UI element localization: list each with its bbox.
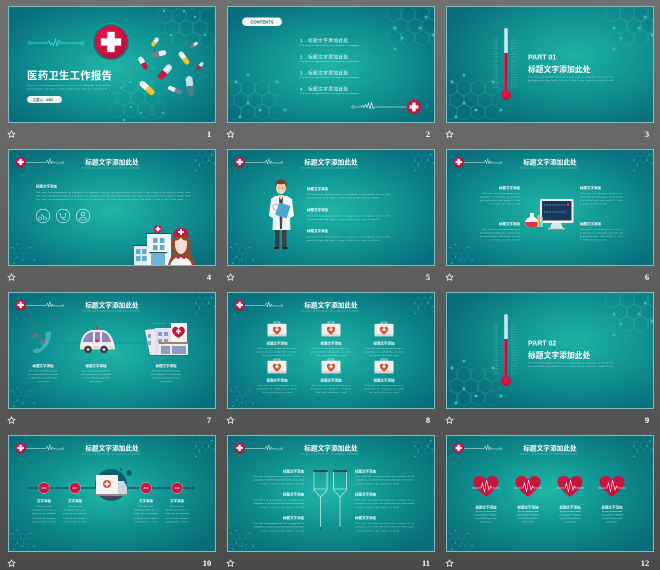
- kit item 3: [364, 322, 404, 357]
- section description: [528, 76, 614, 82]
- slide 2: contents: [227, 6, 435, 123]
- kit item 6: 标题文字添加: [374, 378, 395, 382]
- header icon: [16, 157, 64, 168]
- slide 4: text with hospital and nurse: [8, 149, 216, 266]
- text block 3: 标题文字添加: [307, 228, 328, 233]
- slide title: 标题文字添加此处: [85, 158, 139, 166]
- kit item 6: projector or computer, or print: [364, 388, 404, 390]
- right text block 1: it into a film to be used in a field: [355, 482, 400, 486]
- kit item 2: [311, 322, 351, 357]
- text block bottom right: [580, 221, 624, 242]
- text column 2: The user can: [68, 505, 83, 508]
- kit item 2: the presentation and: [316, 354, 347, 357]
- left text block 1: [253, 468, 305, 486]
- text block top left: presentation and make it into: [480, 199, 521, 202]
- illustration: flask and test tubes: [525, 213, 543, 228]
- text column 4: [165, 498, 189, 524]
- text column 1: 文字添加: [37, 498, 51, 503]
- illustration: left crutch: [314, 471, 328, 529]
- kit item 3: The user can demonstrate on a: [365, 347, 404, 350]
- text column 2: [63, 498, 87, 524]
- slide numbers: 7: [207, 415, 212, 425]
- heart item 4: or print the present: [602, 517, 622, 520]
- right text block 1: The user can demonstrate on a projector or: [355, 475, 414, 478]
- slide numbers: 9: [645, 415, 649, 425]
- kit item 5: projector or computer, or print: [311, 388, 351, 390]
- header icon: [454, 157, 502, 168]
- text column 4: and make it film: [166, 520, 189, 524]
- contents list: 3 . 标题文字添加此处: [300, 70, 348, 76]
- cover description: presentation and make it into a film to be used in a wider field: [27, 88, 108, 90]
- right text block 1: [355, 468, 415, 486]
- text block top right: The user can demonstrate on a: [580, 192, 623, 195]
- right text block 2: it into a film to be used in a field: [355, 506, 400, 509]
- year markers: 2016: [41, 487, 47, 490]
- illustration: hospital with heart sign: [145, 323, 189, 356]
- part heading: PART 02: [528, 340, 556, 348]
- text column 2: 标题文字添加: [86, 363, 107, 368]
- slide 12: four hearts: [446, 435, 654, 552]
- cover description: [27, 84, 111, 90]
- kit item 6: the presentation and: [369, 391, 400, 394]
- slide 6: monitor: [446, 149, 654, 266]
- slide subtitle: The user can demonstrate on a projector or computer: [301, 166, 359, 170]
- header icon: [454, 443, 502, 454]
- illustration: monitor: [540, 199, 574, 229]
- slide numbers: 11: [422, 558, 430, 568]
- text column 3: The user can: [139, 505, 154, 508]
- text block top left: 标题文字添加: [499, 185, 520, 190]
- text block bottom left: projector or computer, or print the: [480, 232, 521, 234]
- text block 1: 标题文字添加: [307, 186, 328, 191]
- text block 1: [307, 186, 391, 200]
- text column 1: on a projector or computer: [28, 373, 58, 376]
- heart item 3: or print the present: [560, 517, 580, 520]
- icon: capsules: [137, 37, 204, 96]
- left text block 3: The user can demonstrate on a projector or: [253, 522, 304, 525]
- section description: presentation and make it into a film to be used in a wider field: [528, 79, 614, 82]
- text column 2: on a projector or computer: [81, 373, 111, 376]
- text column 4: The user can: [170, 505, 185, 508]
- left text block 3: 标题文字添加: [283, 515, 304, 520]
- heart item 3: and make: [564, 522, 577, 524]
- text column 3: and make: [160, 381, 173, 383]
- slide title: 标题文字添加此处: [304, 158, 358, 166]
- text column 1: demonstrate on a: [32, 508, 56, 512]
- heart item 2: 标题文字添加: [518, 504, 539, 510]
- subheading: 标题文字添加: [36, 184, 57, 188]
- presenter pill: 汇报人：ABC: [33, 97, 54, 102]
- text block bottom right: presentation and make it into: [580, 235, 624, 238]
- heart item 1: or print the present: [476, 517, 496, 520]
- kit item 1: projector or computer, or print: [257, 350, 297, 354]
- heart item 3: The user can demonstrate: [560, 510, 581, 513]
- slide 1: cover: [8, 6, 216, 123]
- kit item 1: 标题文字添加: [266, 340, 288, 346]
- text block bottom right: 标题文字添加: [580, 221, 601, 226]
- text column 1: and make: [37, 381, 50, 383]
- text column 4: 文字添加: [170, 498, 184, 503]
- heart item 2: The user can demonstrate: [518, 510, 539, 513]
- text column 1: or print the presentation: [29, 376, 58, 380]
- slide title: 标题文字添加此处: [85, 444, 139, 452]
- heart item 2: or print the present: [518, 517, 538, 520]
- section description: [528, 362, 614, 368]
- contents list: 1 . 标题文字添加此处: [300, 37, 348, 44]
- heart item 3: on a projector or computer: [559, 514, 581, 516]
- left text block 1: computer, or print the presentation and make: [253, 478, 305, 482]
- text column 3: and make it film: [134, 520, 158, 524]
- slide numbers: 12: [641, 558, 649, 568]
- kit item 5: [311, 359, 351, 394]
- text block 3: [307, 228, 391, 242]
- left text block 2: computer, or print the presentation and make: [253, 502, 305, 505]
- right text block 1: computer, or print the presentation and make: [355, 478, 415, 482]
- left text block 2: 标题文字添加: [283, 492, 304, 496]
- contents list: The user can demonstrate on a projector or computer: [300, 76, 359, 79]
- icon: phone with 24: [32, 331, 51, 353]
- icon: phone with 24: 24: [40, 340, 46, 346]
- header icon: [234, 443, 283, 454]
- heart item 4: The user can demonstrate: [602, 510, 623, 513]
- heart item 3: [556, 476, 584, 524]
- kit item 5: The user can demonstrate on a: [312, 384, 351, 387]
- body text: The user can demonstrate on a projector or computer, or print the presentation and make it into a film to be used in a wider field: [36, 194, 191, 198]
- heart item 2: [514, 476, 542, 524]
- header icon: [234, 157, 283, 168]
- heart item 2: on a projector or computer: [517, 514, 539, 516]
- kit item 6: The user can demonstrate on a: [365, 384, 404, 387]
- right text block 2: 标题文字添加: [355, 492, 376, 496]
- slide numbers: 8: [426, 415, 430, 425]
- kit item 3: projector or computer, or print: [364, 350, 404, 354]
- slide title: 标题文字添加此处: [304, 444, 358, 452]
- text column 2: and make: [90, 381, 103, 383]
- text column 1: projector or computer: [32, 512, 56, 515]
- left text block 1: it into a film to be used in a field: [260, 482, 305, 486]
- text block top right: a film to be used: [580, 202, 607, 206]
- contents list: The user can demonstrate on a projector or computer: [300, 92, 359, 95]
- slide title: 标题文字添加此处: [523, 158, 577, 166]
- slide 7: emergency flow: [8, 292, 216, 409]
- contents pill: [242, 18, 282, 26]
- text column 1: [32, 498, 56, 524]
- icon: phone with 24: 24: [32, 334, 38, 340]
- text block bottom left: presentation and make it into: [480, 235, 521, 238]
- kit item 1: the presentation and: [262, 354, 293, 357]
- text block 1: The user can demonstrate on a projector or computer, or print the: [307, 193, 391, 196]
- heart item 1: The user can demonstrate: [476, 510, 497, 513]
- slide numbers: 4: [207, 272, 212, 282]
- slide numbers: 10: [203, 558, 211, 568]
- kit item 2: The user can demonstrate on a: [312, 347, 351, 350]
- text block top left: [480, 185, 521, 206]
- kit item 1: The user can demonstrate on a: [258, 347, 297, 350]
- heart item 2: and make: [522, 522, 535, 524]
- text column 2: demonstrate on a: [64, 508, 87, 512]
- left text block 3: it into a film to be used in a field: [260, 530, 305, 532]
- heart item 3: 标题文字添加: [560, 504, 581, 510]
- text block 1: presentation and make it into a film to be used in a field: [307, 196, 380, 200]
- text column 3: 文字添加: [139, 498, 153, 503]
- text column 2: [81, 363, 111, 383]
- header icon: [234, 300, 283, 311]
- timeline arrow: [28, 486, 196, 490]
- title: 医药卫生工作报告: [27, 69, 112, 82]
- text column 1: or print the project: [32, 517, 56, 520]
- text column 3: The user can demonstrate: [152, 370, 181, 372]
- icon: thermometer: [495, 28, 515, 100]
- text column 3: [134, 498, 158, 524]
- text column 4: projector or computer: [165, 512, 189, 515]
- illustration: ambulance: [80, 326, 115, 353]
- text block top left: projector or computer, or print the: [480, 196, 521, 198]
- kit item 4: projector or computer, or print: [257, 388, 297, 390]
- text block top left: The user can demonstrate on a: [482, 192, 521, 195]
- icon: heartbeat and cross: [352, 100, 421, 115]
- right text block 2: The user can demonstrate on a projector or: [355, 498, 414, 502]
- slide subtitle: The user can demonstrate on a projector or computer: [82, 310, 140, 312]
- heart item 4: [598, 476, 626, 524]
- left text block 1: 标题文字添加: [283, 468, 304, 474]
- kit item 2: projector or computer, or print: [311, 350, 351, 354]
- presenter pill: [27, 96, 62, 103]
- slide 11: crutches: [227, 435, 435, 552]
- right text block 2: computer, or print the presentation and make: [355, 502, 415, 505]
- slide title: 标题文字添加此处: [304, 300, 358, 310]
- slide subtitle: The user can demonstrate on a projector or computer: [301, 310, 359, 312]
- text block bottom left: a film to be used: [490, 238, 521, 242]
- right text block 3: The user can demonstrate on a projector or: [355, 522, 414, 525]
- text column 3: on a projector or computer: [151, 373, 181, 376]
- text block 2: [307, 207, 391, 221]
- text column 2: and make it film: [64, 520, 87, 524]
- right text block 3: it into a film to be used in a field: [355, 530, 400, 532]
- illustration: nurse: [168, 228, 196, 266]
- slide title: 标题文字添加此处: [523, 444, 577, 452]
- body text: The user can demonstrate on a projector or computer, or print the presentation and make it into a film to be used in a wider field: [36, 191, 191, 194]
- text column 3: or print the presentation: [152, 376, 181, 380]
- illustration: delivery truck on dark circle: [95, 468, 132, 501]
- slide 9: part 02: [446, 292, 654, 409]
- text column 1: 标题文字添加: [32, 363, 54, 368]
- right text block 1: 标题文字添加: [355, 468, 376, 474]
- text column 1: [28, 363, 58, 383]
- illustration: doctor: [269, 180, 294, 249]
- text column 2: projector or computer: [63, 512, 87, 515]
- kit item 4: The user can demonstrate on a: [258, 384, 297, 387]
- slide numbers: 6: [645, 272, 649, 282]
- kit item 5: 标题文字添加: [320, 378, 342, 382]
- text column 3: or print the project: [134, 517, 158, 520]
- text block bottom right: The user can demonstrate on a: [580, 228, 623, 231]
- slide subtitle: The user can demonstrate on a projector or computer: [520, 452, 578, 456]
- right text block 2: [355, 492, 415, 509]
- year markers: [38, 482, 182, 494]
- text column 2: or print the presentation: [82, 376, 111, 380]
- heart item 4: 标题文字添加: [602, 504, 623, 510]
- left text block 2: The user can demonstrate on a projector or: [253, 498, 304, 502]
- kit item 1: [257, 322, 297, 357]
- kit item 3: the presentation and: [369, 354, 400, 357]
- text block 2: 标题文字添加: [307, 207, 328, 212]
- text block top right: [580, 185, 624, 206]
- text column 3: 标题文字添加: [156, 363, 177, 368]
- contents list: The user can demonstrate on a projector or computer: [300, 44, 359, 47]
- section title: 标题文字添加此处: [528, 350, 591, 360]
- left text block 2: [253, 492, 305, 509]
- right text block 3: 标题文字添加: [355, 515, 376, 520]
- slide 10: timeline: [8, 435, 216, 552]
- right text block 3: computer, or print the presentation and make: [355, 526, 415, 528]
- illustration: right crutch: [333, 471, 347, 529]
- right text block 3: [355, 515, 415, 532]
- text block bottom left: The user can demonstrate on a: [482, 228, 521, 231]
- kit item 3: 标题文字添加: [374, 340, 395, 346]
- kit item 4: the presentation and: [262, 391, 293, 394]
- body text: [36, 191, 191, 201]
- slide title: 标题文字添加此处: [85, 300, 139, 310]
- text column 2: 文字添加: [68, 498, 82, 503]
- text block bottom left: [480, 221, 521, 242]
- text column 1: and make it film: [32, 520, 56, 524]
- part heading: PART 01: [528, 54, 556, 62]
- left text block 3: [253, 515, 305, 532]
- kit item 4: 标题文字添加: [266, 378, 288, 382]
- slide 3: part 01: [446, 6, 654, 123]
- contents list: 2 . 标题文字添加此处: [300, 54, 348, 60]
- kit item 2: 标题文字添加: [320, 340, 342, 346]
- text block bottom right: a film to be used: [580, 238, 607, 242]
- text block 3: presentation and make it into a film to be used in a field: [307, 239, 380, 242]
- body text: The user can demonstrate on a projector or computer, or print the presentation and make it into a film to be used: [36, 198, 184, 201]
- icon: thermometer: [495, 314, 515, 386]
- contents pill: CONTENTS: [250, 20, 274, 24]
- slide numbers: 2: [426, 129, 430, 139]
- heart item 1: [472, 476, 500, 524]
- year markers: 2019: [174, 487, 180, 490]
- slide subtitle: The user can demonstrate on a projector or computer: [301, 452, 359, 456]
- contents list: [300, 37, 359, 95]
- slide numbers: 3: [645, 129, 649, 139]
- slide 8: six first aid kits: [227, 292, 435, 409]
- heart item 1: 标题文字添加: [476, 504, 497, 510]
- contents list: The user can demonstrate on a projector or computer: [300, 60, 359, 63]
- contents list: 4 . 标题文字添加此处: [300, 86, 348, 92]
- slide numbers: [203, 129, 649, 568]
- left text block 2: it into a film to be used in a field: [260, 506, 305, 509]
- text block 3: The user can demonstrate on a projector or computer, or print the: [307, 236, 391, 238]
- header icon: [16, 443, 64, 454]
- kit item 5: the presentation and: [316, 391, 347, 394]
- slide subtitle: The user can demonstrate on a projector or computer: [520, 166, 578, 170]
- kit item 6: [364, 359, 404, 394]
- section description: presentation and make it into a film to be used in a wider field: [528, 365, 614, 368]
- icons: three circles: [36, 209, 90, 223]
- slide star markers: [8, 131, 453, 566]
- text column 4: or print the project: [166, 517, 189, 520]
- slide numbers: 1: [207, 129, 211, 139]
- text block bottom left: 标题文字添加: [499, 221, 520, 226]
- text block top right: presentation and make it into: [580, 199, 624, 202]
- text column 3: projector or computer: [134, 512, 158, 515]
- year markers: 2018: [143, 487, 149, 490]
- text block 2: The user can demonstrate on a projector or computer, or print the: [307, 214, 391, 218]
- heart item 1: on a projector or computer: [475, 514, 497, 516]
- text column 1: The user can demonstrate: [29, 370, 58, 372]
- text block 2: presentation and make it into a film to be used in a field: [307, 218, 380, 221]
- slide subtitle: The user can demonstrate on a projector or computer: [82, 166, 140, 170]
- text block bottom right: projector or computer, or print the: [580, 232, 624, 234]
- header icon: [16, 300, 64, 311]
- icon: heartbeat line: [28, 38, 84, 46]
- text column 4: demonstrate on a: [166, 508, 189, 512]
- left text block 1: The user can demonstrate on a projector or: [253, 475, 304, 478]
- text column 3: [151, 363, 181, 383]
- text block top left: a film to be used: [490, 202, 521, 206]
- text block top right: 标题文字添加: [580, 185, 601, 190]
- slide subtitle: The user can demonstrate on a projector or computer: [82, 452, 140, 456]
- heart item 1: and make: [480, 522, 493, 524]
- text column 1: The user can: [37, 505, 52, 508]
- text column 2: or print the project: [64, 517, 87, 520]
- heart item 4: on a projector or computer: [601, 514, 623, 516]
- section description: The user can demonstrate on a projector or computer, or print the: [528, 362, 614, 364]
- left text block 3: computer, or print the presentation and make: [253, 526, 305, 528]
- illustration: hospital: [133, 225, 171, 266]
- icon: red cross badge: [92, 24, 130, 60]
- slide numbers: 5: [426, 272, 430, 282]
- section description: The user can demonstrate on a projector or computer, or print the: [528, 76, 614, 78]
- year markers: 2017: [72, 487, 78, 490]
- connector line: [52, 342, 145, 344]
- cover description: The user can demonstrate on a projector or computer, or print the: [27, 84, 111, 87]
- text column 2: The user can demonstrate: [82, 370, 111, 372]
- text column 3: demonstrate on a: [134, 508, 158, 512]
- slide 5: doctor: [227, 149, 435, 266]
- text block top right: projector or computer, or print the: [580, 196, 624, 198]
- kit item 4: [257, 359, 297, 394]
- section title: 标题文字添加此处: [528, 64, 591, 74]
- heart item 4: and make: [606, 522, 619, 524]
